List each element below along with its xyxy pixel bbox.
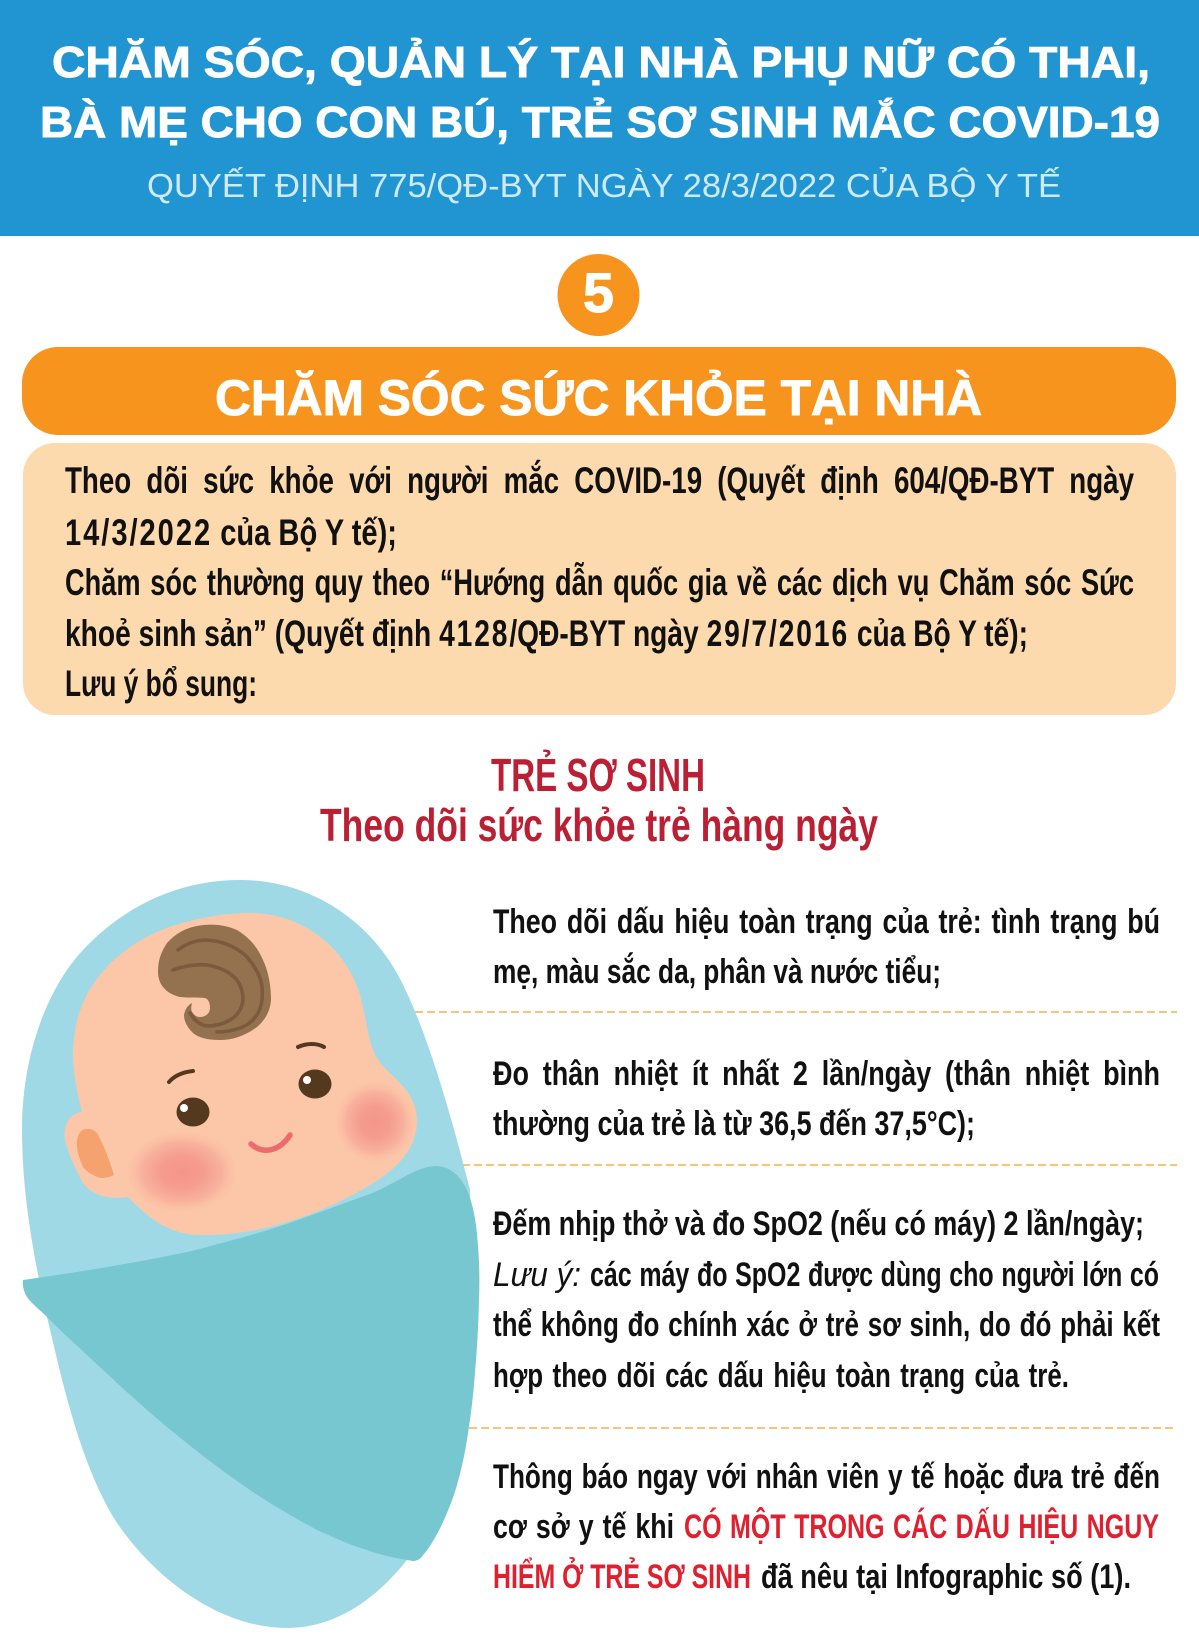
cheeks	[122, 1078, 418, 1216]
panel: home health notes	[23, 443, 1176, 715]
mouth	[251, 1135, 290, 1150]
subtitle: QUYẾT ĐỊNH 775/QĐ-BYT NGÀY 28/3/2022 CỦA BỘ Y TẾ	[147, 167, 1061, 204]
title	[40, 37, 1160, 147]
red heading: Theo dõi sức khỏe trẻ hàng ngày	[320, 799, 878, 851]
text block: danger signs: cơ sở y tế khi	[493, 1508, 674, 1546]
ear	[77, 1129, 114, 1178]
text block: temperature: thường của trẻ là từ 36,5 đến 37,5°C);	[493, 1105, 975, 1143]
baby face	[64, 913, 417, 1235]
number badge	[558, 254, 640, 336]
text block: breathing and SpO2	[493, 1205, 1160, 1395]
swaddle blanket	[22, 880, 470, 1628]
red heading	[320, 749, 878, 851]
text block: daily signs: mẹ, màu sắc da, phân và nước tiểu;	[493, 953, 941, 991]
illustration: swaddled baby	[22, 880, 479, 1628]
number badge: 5	[583, 261, 614, 324]
hair	[158, 925, 271, 1040]
title: CHĂM SÓC, QUẢN LÝ TẠI NHÀ PHỤ NỮ CÓ THAI,	[52, 37, 1150, 87]
text block: breathing and SpO2: Lưu ý:	[493, 1256, 581, 1294]
panel: home health notes: khoẻ sinh sản” (Quyết định 4128/QĐ-BYT ngày 29/7/2016 của Bộ Y tế);	[65, 613, 1028, 654]
text block: danger signs	[493, 1458, 1160, 1596]
text block: danger signs: HIỂM Ở TRẺ SƠ SINH	[493, 1558, 751, 1596]
section heading bar	[22, 347, 1176, 435]
section heading bar: CHĂM SÓC SỨC KHỎE TẠI NHÀ	[215, 369, 982, 426]
text block: daily signs	[493, 903, 1160, 991]
eyebrows	[169, 1044, 324, 1082]
eyes	[176, 1070, 332, 1126]
panel: home health notes: Lưu ý bổ sung:	[65, 663, 257, 704]
text block: temperature	[493, 1055, 1160, 1143]
title: BÀ MẸ CHO CON BÚ, TRẺ SƠ SINH MẮC COVID-19	[40, 97, 1160, 147]
header band	[0, 0, 1199, 236]
red heading: TRẺ SƠ SINH	[491, 749, 705, 801]
wrap fold	[23, 1166, 479, 1561]
panel: home health notes: 14/3/2022 của Bộ Y tế);	[65, 512, 397, 553]
dashed dividers	[415, 1012, 1177, 1428]
